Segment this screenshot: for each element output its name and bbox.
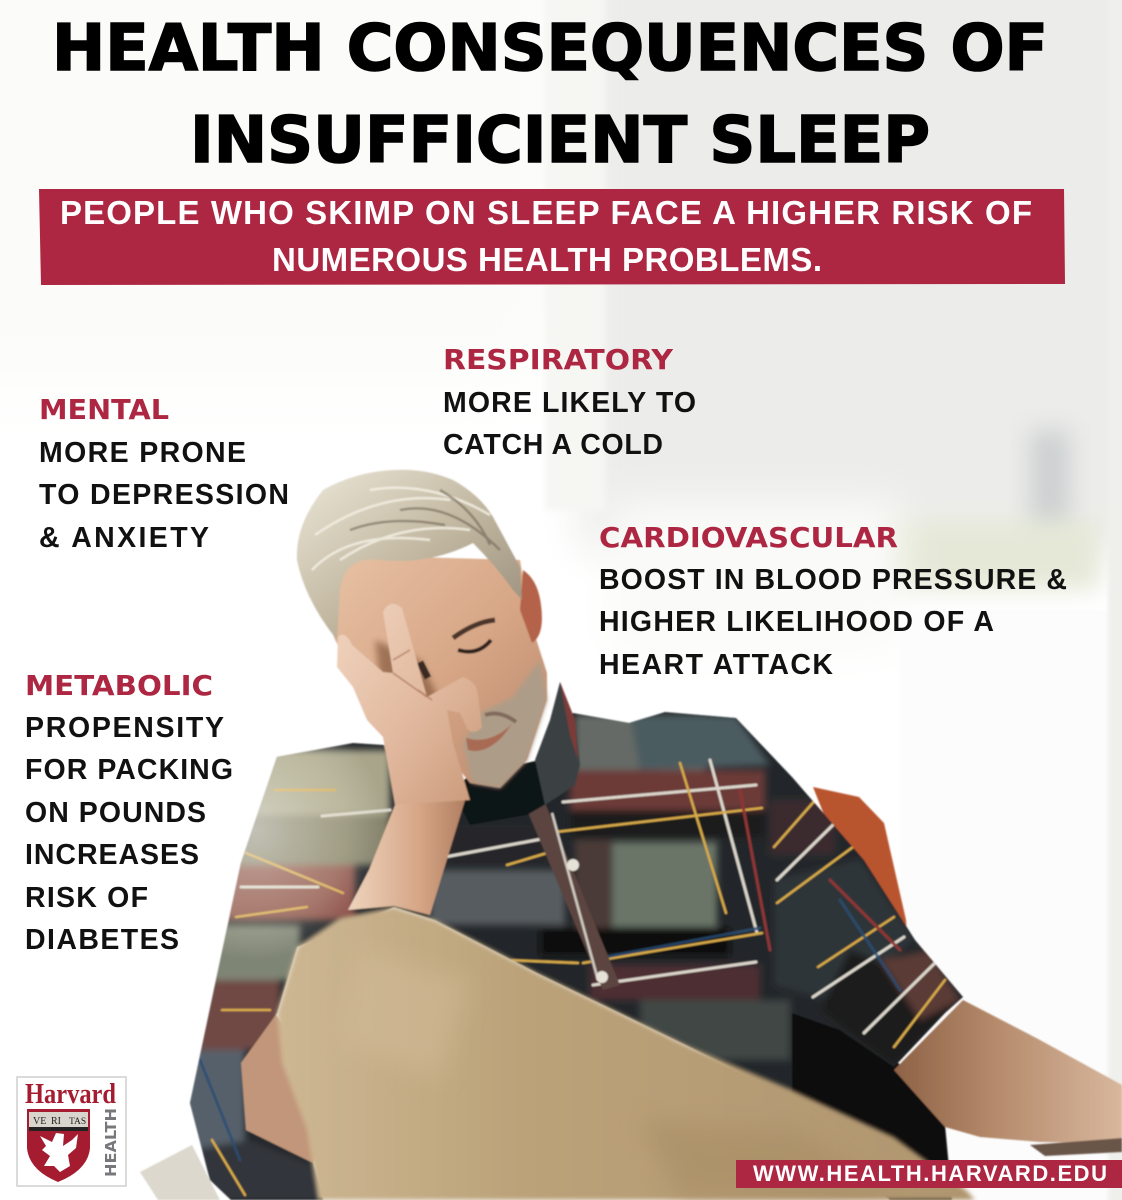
subtitle banner: NUMEROUS HEALTH PROBLEMS. — [272, 241, 822, 278]
text block: mental: MENTAL — [39, 394, 169, 426]
right arm — [894, 1000, 1122, 1143]
text block: cardiovascular: BOOST IN BLOOD PRESSURE & — [599, 564, 1067, 596]
text block: metabolic: RISK OF — [25, 882, 148, 914]
text block: metabolic: INCREASES — [25, 839, 199, 871]
shirt collar and dark neck — [452, 682, 580, 825]
head and face — [320, 555, 547, 788]
shirt plaid lines — [200, 760, 945, 1195]
icon: shield: VE — [33, 1116, 46, 1127]
text block: cardiovascular: HEART ATTACK — [599, 649, 833, 681]
text block: respiratory — [443, 344, 696, 461]
Harvard Health logo — [17, 1077, 126, 1186]
text block: cardiovascular: CARDIOVASCULAR — [599, 522, 898, 554]
man resting head on hand — [140, 470, 1122, 1200]
beard stubble — [463, 660, 547, 788]
chair back — [813, 787, 910, 1000]
title: INSUFFICIENT SLEEP — [190, 104, 930, 178]
subtitle banner — [39, 189, 1065, 285]
text block: metabolic: PROPENSITY — [25, 712, 224, 744]
ear — [520, 570, 542, 643]
text block: mental — [39, 394, 289, 554]
icon: shield: RI — [51, 1116, 61, 1127]
hair — [297, 470, 522, 640]
icon: shield: TAS — [69, 1117, 86, 1127]
website footer strip: WWW.HEALTH.HARVARD.EDU — [753, 1161, 1107, 1186]
text block: metabolic: METABOLIC — [25, 670, 213, 702]
Harvard Health logo: Harvard — [25, 1078, 116, 1110]
text block: mental: TO DEPRESSION — [39, 479, 289, 511]
plaid shirt — [180, 680, 980, 1200]
text block: cardiovascular: HIGHER LIKELIHOOD OF A — [599, 606, 994, 638]
title — [52, 12, 1048, 178]
hand on forehead — [337, 604, 482, 805]
subtitle banner: PEOPLE WHO SKIMP ON SLEEP FACE A HIGHER RISK OF — [60, 194, 1032, 231]
text block: metabolic: ON POUNDS — [25, 797, 206, 829]
forearm under knee — [241, 1013, 330, 1165]
text block: mental: & ANXIETY — [39, 522, 209, 554]
text block: respiratory: RESPIRATORY — [443, 344, 674, 376]
text block: respiratory: MORE LIKELY TO — [443, 387, 696, 419]
forearm — [348, 743, 466, 915]
title: HEALTH CONSEQUENCES OF — [52, 12, 1048, 86]
shadow beside fingers — [375, 640, 440, 710]
closed eye and brow — [453, 620, 495, 638]
dark gap under arm — [780, 1000, 952, 1200]
text block: cardiovascular — [599, 522, 1067, 681]
shirt colour blocks — [185, 715, 963, 1200]
text block: metabolic — [25, 670, 233, 956]
text block: metabolic: FOR PACKING — [25, 754, 233, 786]
Harvard Health logo: HEALTH — [102, 1108, 120, 1177]
shirt placket and buttons — [522, 795, 620, 990]
khaki trousers leg — [277, 907, 975, 1200]
text block: respiratory: CATCH A COLD — [443, 429, 663, 461]
mouth — [466, 724, 512, 751]
text block: metabolic: DIABETES — [25, 924, 179, 956]
chair seat — [140, 1145, 220, 1200]
icon: shield — [27, 1109, 90, 1182]
text block: mental: MORE PRONE — [39, 437, 246, 469]
